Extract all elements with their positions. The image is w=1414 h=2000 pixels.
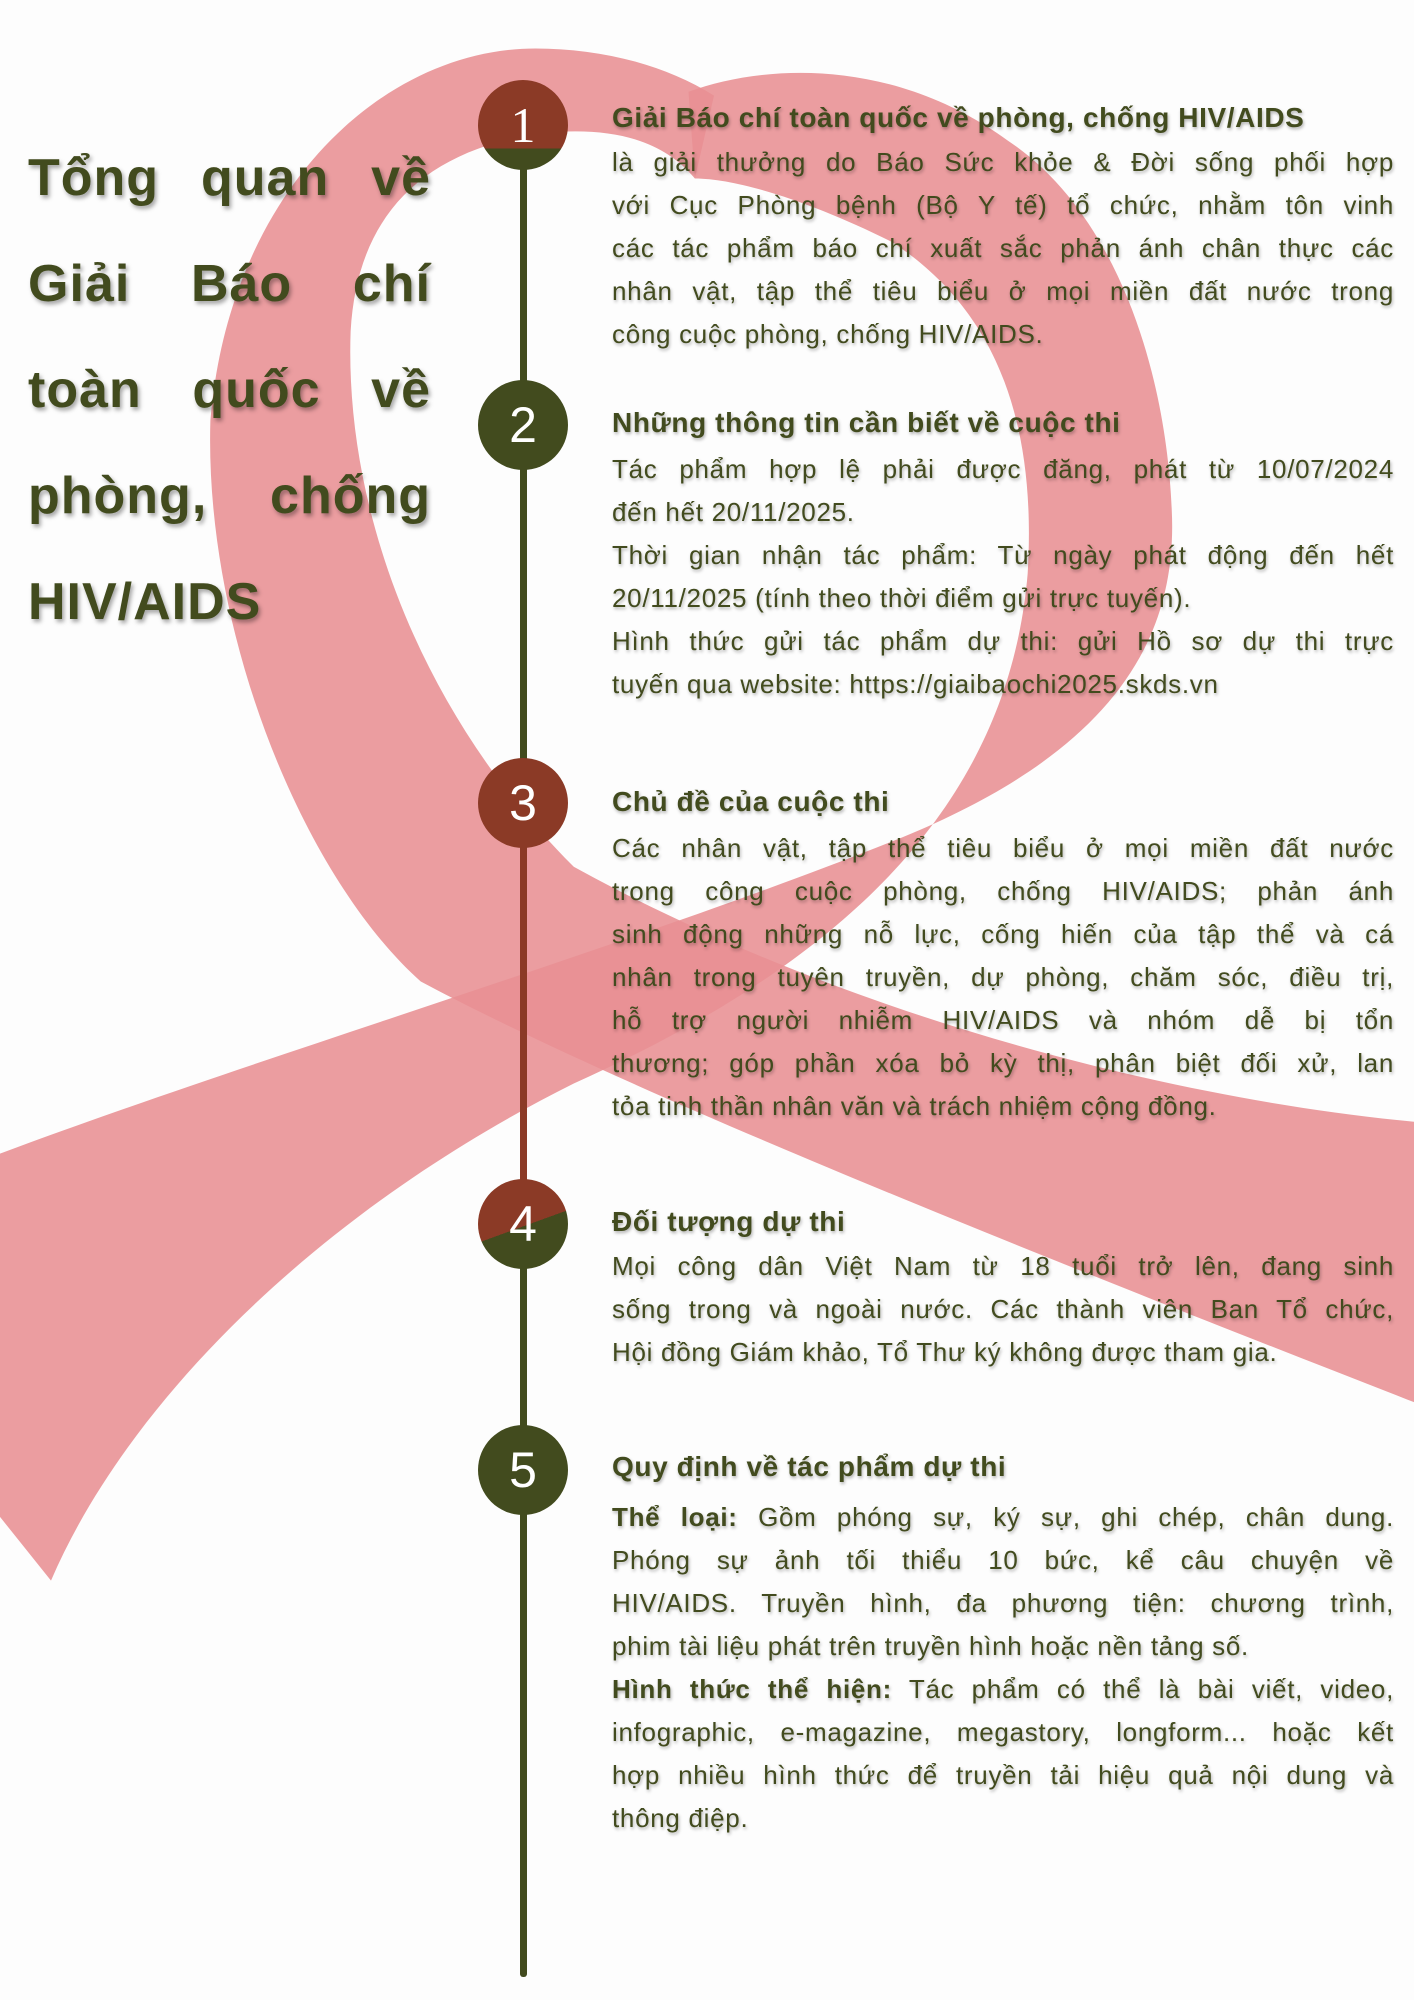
- item 2 text: Thời gian nhận tác phẩm: Từ ngày phát động đến hết: [612, 540, 1394, 570]
- item 2 text: [612, 407, 1395, 702]
- item 5 text: [612, 1451, 1395, 1836]
- circle 4: [478, 1179, 568, 1269]
- item 2 text: Những thông tin cần biết về cuộc thi: [612, 407, 1121, 438]
- circle 1: 1: [510, 97, 536, 153]
- circle 5: 5: [509, 1442, 537, 1498]
- brown segment over ribbon: [520, 821, 527, 1191]
- title: HIV/AIDS: [28, 573, 261, 631]
- circle 2: [478, 380, 568, 470]
- item 4 text: Đối tượng dự thi: [612, 1206, 845, 1237]
- item 1 text: [612, 102, 1395, 352]
- item 2 text: Hình thức gửi tác phẩm dự thi: gửi Hồ sơ dự thi trực: [612, 626, 1394, 656]
- item 1 text: Giải Báo chí toàn quốc về phòng, chống HIV/AIDS: [612, 102, 1304, 133]
- item 5 text: Phóng sự ảnh tối thiểu 10 bức, kể câu chuyện về: [612, 1545, 1394, 1575]
- item 3 text: [612, 786, 1395, 1124]
- item 2 text: Tác phẩm hợp lệ phải được đăng, phát từ 10/07/2024: [612, 454, 1394, 484]
- ribbon strand: left loop to bottom right: [210, 48, 1414, 1402]
- item 4 text: sống trong và ngoài nước. Các thành viên Ban Tổ chức,: [612, 1294, 1394, 1324]
- circle 1: [478, 80, 568, 170]
- circle 3: [478, 758, 568, 848]
- item 3 text: Các nhân vật, tập thể tiêu biểu ở mọi miền đất nước: [612, 833, 1394, 863]
- title: Tổng quan về: [28, 149, 431, 207]
- item 1 text: các tác phẩm báo chí xuất sắc phản ánh chân thực các: [612, 233, 1394, 263]
- item 1 text: với Cục Phòng bệnh (Bộ Y tế) tổ chức, nhằm tôn vinh: [612, 190, 1394, 220]
- item 3 text: tỏa tinh thần nhân văn và trách nhiệm cộng đồng.: [612, 1091, 1217, 1121]
- item 3 text: hỗ trợ người nhiễm HIV/AIDS và nhóm dễ bị tổn: [612, 1005, 1394, 1035]
- title: [28, 149, 434, 631]
- item 5 text: HIV/AIDS. Truyền hình, đa phương tiện: chương trình,: [612, 1588, 1394, 1618]
- item 5 text: phim tài liệu phát trên truyền hình hoặc nền tảng số.: [612, 1631, 1249, 1661]
- item 5 text: thông điệp.: [612, 1803, 748, 1833]
- ribbon strand: right lobe to bottom left: [0, 73, 1172, 1581]
- title: Giải Báo chí: [28, 255, 431, 313]
- item 5 text: infographic, e-magazine, megastory, longform... hoặc kết: [612, 1717, 1394, 1747]
- circle 4: 4: [509, 1196, 537, 1252]
- circle 2: 2: [509, 397, 537, 453]
- item 3 text: Chủ đề của cuộc thi: [612, 786, 889, 817]
- timeline line: [520, 121, 527, 1977]
- item 2 text: tuyến qua website: https://giaibaochi2025.skds.vn: [612, 669, 1219, 699]
- item 2 text: 20/11/2025 (tính theo thời điểm gửi trực tuyến).: [612, 583, 1191, 613]
- item 4 text: Mọi công dân Việt Nam từ 18 tuổi trở lên, đang sinh: [612, 1251, 1394, 1281]
- title: toàn quốc về: [28, 361, 431, 419]
- item 1 text: nhân vật, tập thể tiêu biểu ở mọi miền đất nước trong: [612, 276, 1394, 306]
- item 3 text: nhân trong tuyên truyền, dự phòng, chăm sóc, điều trị,: [612, 962, 1394, 992]
- item 1 text: là giải thưởng do Báo Sức khỏe & Đời sống phối hợp: [612, 147, 1394, 177]
- item 5 text: Hình thức thể hiện: Tác phẩm có thể là bài viết, video,: [612, 1674, 1394, 1704]
- item 5 text: Quy định về tác phẩm dự thi: [612, 1451, 1006, 1482]
- item 5 text: Thể loại: Gồm phóng sự, ký sự, ghi chép, chân dung.: [612, 1502, 1394, 1532]
- title: phòng, chống: [28, 467, 431, 525]
- item 4 text: Hội đồng Giám khảo, Tổ Thư ký không được tham gia.: [612, 1337, 1277, 1367]
- item 3 text: sinh động những nỗ lực, cống hiến của tập thể và cá: [612, 919, 1394, 949]
- item 2 text: đến hết 20/11/2025.: [612, 497, 855, 527]
- item 3 text: trong công cuộc phòng, chống HIV/AIDS; phản ánh: [612, 876, 1394, 906]
- item 3 text: thương; góp phần xóa bỏ kỳ thị, phân biệt đối xử, lan: [612, 1048, 1394, 1078]
- item 4 text: [612, 1206, 1394, 1370]
- item 5 text: hợp nhiều hình thức để truyền tải hiệu quả nội dung và: [612, 1760, 1394, 1790]
- item 1 text: công cuộc phòng, chống HIV/AIDS.: [612, 319, 1043, 349]
- circle 5: [478, 1425, 568, 1515]
- circle 3: 3: [509, 775, 537, 831]
